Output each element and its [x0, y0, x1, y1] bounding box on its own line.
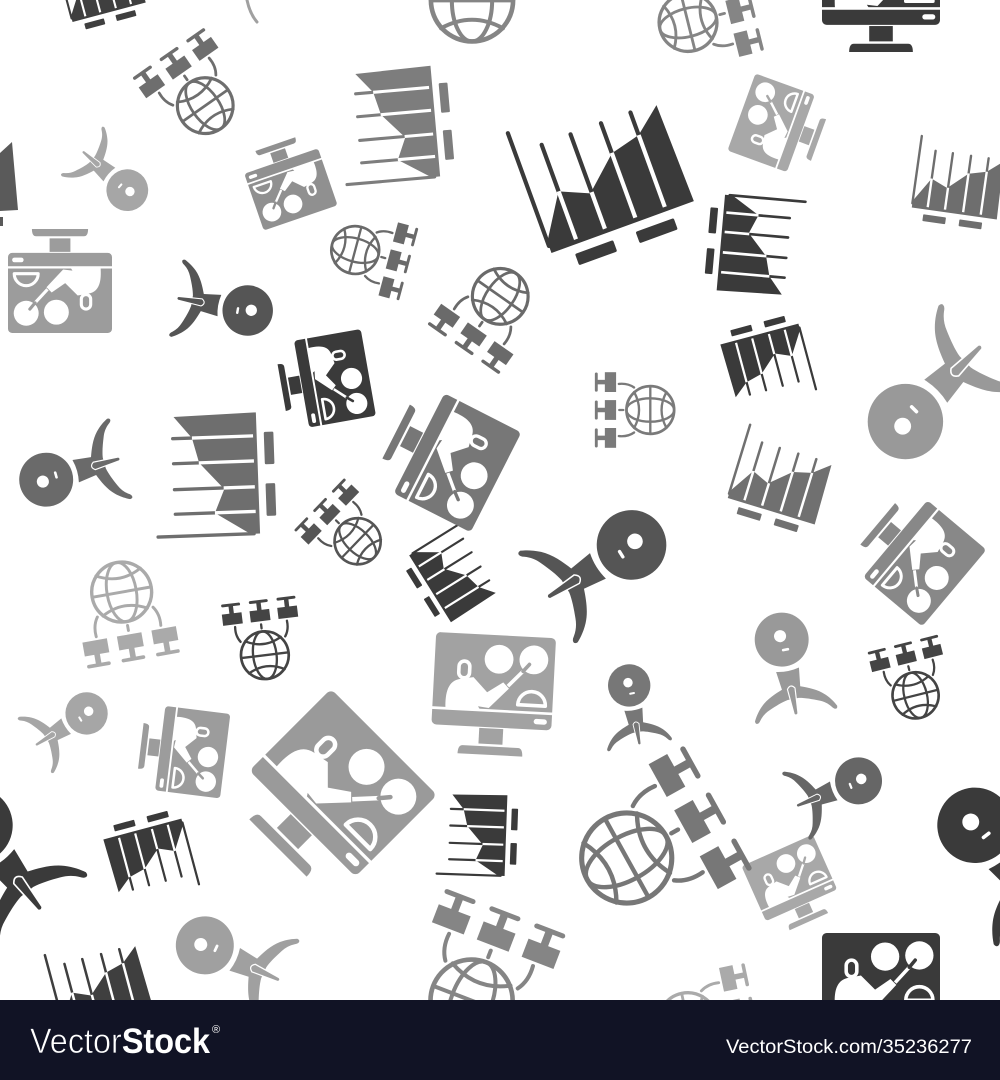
icon: dark monitor top — [821, 0, 941, 52]
icon: network inverted left — [70, 554, 180, 667]
icon: monitor top right — [727, 73, 833, 179]
registered mark: ® — [212, 1024, 220, 1036]
icon: probe centre — [517, 481, 690, 644]
icon: large dark chart — [508, 81, 701, 273]
icon: large probe right — [837, 303, 1000, 490]
icon: large network — [553, 746, 751, 942]
icon: chart bottom left clipped — [45, 932, 156, 1041]
icon: network bottom clipped — [650, 963, 762, 1073]
icon: dark monitor centre — [274, 328, 376, 432]
icon: large network bottom — [396, 890, 566, 1062]
icon: network top left — [133, 29, 257, 154]
icon: dark probe right edge — [906, 760, 1000, 947]
icon: dark monitor bottom — [821, 933, 941, 1051]
icon: network centre left — [322, 207, 417, 301]
icon: sideways dark chart bottom — [437, 793, 519, 876]
icon: upright probe — [735, 605, 838, 724]
icon: inverted monitor — [238, 131, 338, 231]
icon: small probe left — [17, 674, 122, 774]
icon: monitor left lower — [136, 703, 230, 799]
icon: chart top left clipped — [56, 0, 148, 32]
footer bar — [0, 1000, 1000, 1080]
icon: network right — [867, 636, 957, 727]
brand logo: VectorStock — [30, 1022, 210, 1061]
icon: inverted monitor left — [7, 229, 113, 333]
icon: probe top left — [60, 126, 164, 228]
icon: sideways chart left — [154, 412, 277, 537]
icon: probe bottom — [160, 892, 300, 1022]
icon: large tilted monitor — [224, 688, 438, 902]
icon: probe lower right — [782, 738, 894, 840]
icon: probe left middle — [9, 418, 133, 527]
icon: small probe centre — [593, 659, 672, 752]
icon: clipped arm fragment — [247, 0, 257, 22]
icon: network upright — [221, 597, 305, 683]
icon: chart fragment at left edge — [0, 142, 18, 226]
icon: probe left — [169, 259, 279, 353]
icon: inverted chart — [717, 313, 816, 410]
icon: chart right middle — [724, 425, 837, 537]
icon: network middle — [596, 372, 674, 448]
icon: sideways chart top — [337, 64, 455, 185]
icon: network top centre — [649, 0, 763, 74]
icon: inverted chart lower left — [100, 808, 199, 905]
icon: monitor lower right — [741, 834, 845, 938]
icon: chart right edge — [910, 136, 1000, 231]
icon: tilted monitor right — [845, 485, 987, 627]
icon: globe top clipped — [407, 0, 537, 41]
icon: upright monitor — [429, 632, 557, 758]
icon: network centre — [428, 248, 552, 373]
image url: VectorStock.com/35236277 — [726, 1037, 972, 1058]
icon: network diagonal — [295, 479, 400, 584]
icon: sideways dark chart — [703, 194, 805, 297]
icon: tilted dark chart — [400, 520, 507, 628]
icon: tilted monitor centre — [370, 381, 522, 533]
icon: dark probe left edge — [0, 760, 88, 947]
